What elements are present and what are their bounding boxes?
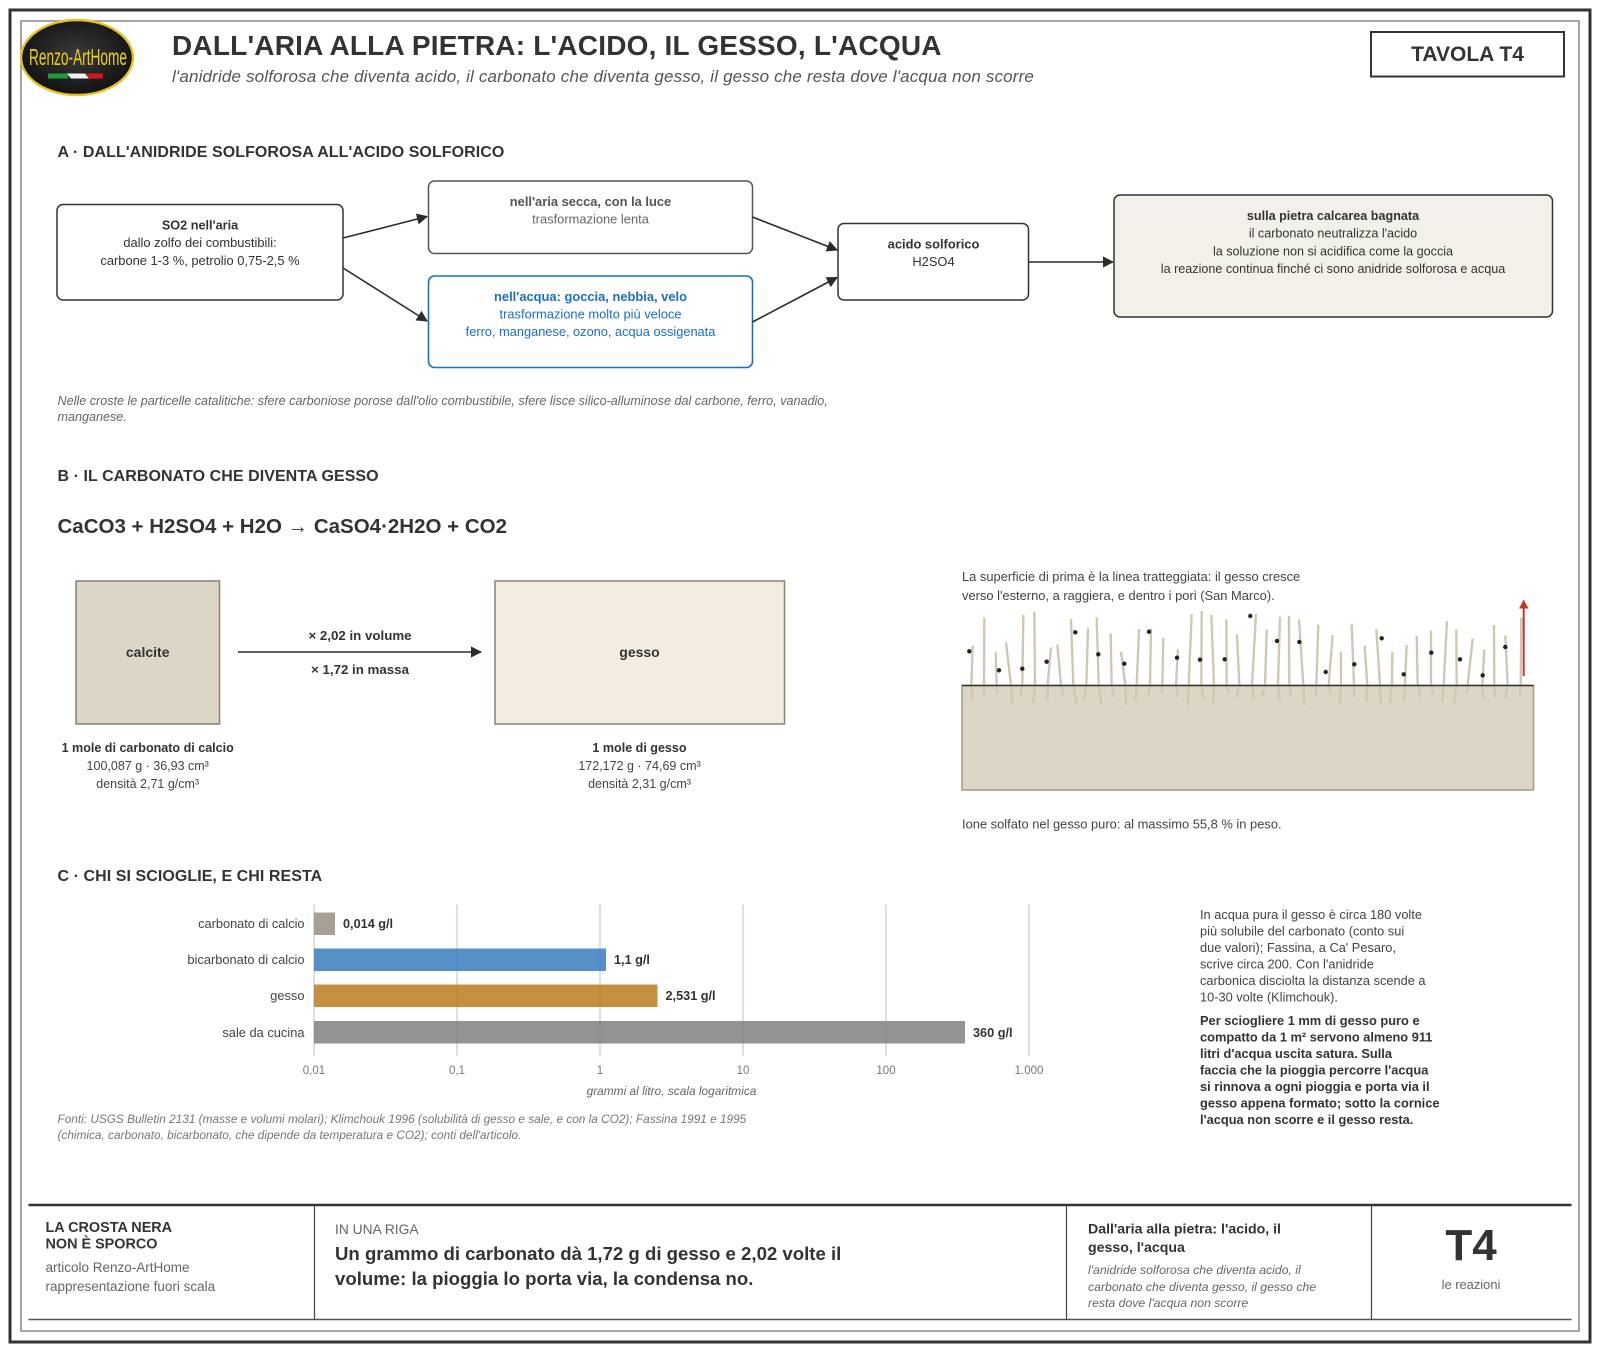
footer: series title [46,1220,216,1294]
footer: one-line summary: volume: la pioggia lo porta via, la condensa no. [335,1268,753,1289]
side note: water needed: gesso appena formato; sotto la cornice [1200,1096,1440,1110]
side note: water needed: Per sciogliere 1 mm di gesso puro e [1200,1013,1420,1028]
gypsum caption: densità 2,31 g/cm³ [588,777,691,791]
footer: series title: rappresentazione fuori scala [46,1279,216,1294]
logo: Renzo-ArtHome [21,20,133,95]
side note: solubility ratios [1200,907,1426,1004]
box: water path [428,276,752,368]
axis tick labels: 0,1 [449,1065,465,1077]
conversion arrow with factors: × 2,02 in volume [308,628,412,643]
box: on wet limestone: sulla pietra calcarea bagnata [1247,209,1420,223]
side note: solubility ratios: scrive circa 200. Con l'anidride [1200,956,1374,972]
calcite caption [62,741,234,791]
box: SO2 in air: carbone 1-3 %, petrolio 0,75-2,5 % [100,253,300,268]
gypsum caption: 1 mole di gesso [592,741,687,755]
box: dry air path [428,181,752,254]
bar: calcium carbonate: 0,014 g/l [343,917,393,931]
solubility bar chart [187,904,1043,1098]
footer: one-line summary: IN UNA RIGA [335,1222,419,1237]
stone block [962,686,1534,790]
calcite block: calcite [126,644,170,660]
bar: calcium carbonate: carbonato di calcio [198,916,304,931]
box: on wet limestone: la reazione continua finché ci sono anidride solforosa e acqua [1161,262,1505,276]
footer: plate title [1088,1220,1316,1310]
side note: water needed: compatto da 1 m² servono almeno 911 [1200,1030,1432,1044]
diagram: gypsum crystals on stone [962,600,1534,790]
box: on wet limestone: il carbonato neutralizza l'acido [1249,226,1417,240]
box: sulphuric acid: H2SO4 [912,254,955,269]
box: SO2 in air: dallo zolfo dei combustibili: [123,235,277,250]
side note: water needed: l'acqua non scorre e il gesso resta. [1200,1112,1413,1127]
crust diagram caption: La superficie di prima è la linea tratteggiata: il gesso cresce [962,569,1300,584]
footer: plate title: carbonato che diventa gesso, il gesso che [1088,1280,1316,1294]
gypsum caption: 172,172 g · 74,69 cm³ [578,759,701,773]
note on catalytic particles: Nelle croste le particelle catalitiche: sfere carboniose porose dall'olio combustibile, sfere lisce silico-alluminose dal carbone, ferro, vanadio, [58,394,828,408]
note on catalytic particles [58,394,828,424]
footer: plate title: Dall'aria alla pietra: l'acido, il [1088,1220,1281,1236]
bar: calcium bicarbonate: bicarbonato di calcio [187,952,304,967]
bar: calcium bicarbonate [187,948,650,971]
axis tick labels: 1.000 [1015,1065,1043,1077]
grid lines [314,904,1029,1056]
arrow: acid to limestone [1028,261,1113,263]
box: sulphuric acid [838,224,1028,300]
bar: table salt [222,1021,1012,1044]
footer: plate title: l'anidride solforosa che diventa acido, il [1088,1263,1301,1277]
box: water path: ferro, manganese, ozono, acqua ossigenata [466,324,716,339]
plate badge [1371,32,1564,76]
section B heading: B · IL CARBONATO CHE DIVENTA GESSO [58,468,379,485]
panel B: carbonate becomes gypsum [58,468,1534,832]
conversion arrow with factors: × 1,72 in massa [311,662,410,677]
side note: water needed: litri d'acqua uscita satura. Sulla [1200,1046,1393,1061]
footer: plate title: resta dove l'acqua non scorre [1088,1296,1249,1310]
axis tick labels: 1 [597,1065,603,1077]
crust diagram caption [962,569,1300,603]
box: SO2 in air: SO2 nell'aria [162,218,239,232]
side note: water needed: si rinnova a ogni pioggia e porta via il [1200,1079,1430,1094]
axis tick labels [303,1065,1043,1077]
crust diagram caption: verso l'esterno, a raggiera, e dentro i pori (San Marco). [962,588,1275,603]
section C heading: C · CHI SI SCIOGLIE, E CHI RESTA [58,868,323,885]
arrow: dry air to acid [752,217,837,250]
gypsum caption [578,741,701,791]
footer: plate number [1442,1221,1500,1292]
box: on wet limestone: la soluzione non si acidifica come la goccia [1213,244,1453,258]
axis title: grammi al litro, scala logaritmica [587,1084,757,1098]
axis tick labels: 10 [737,1065,749,1077]
panel C: who dissolves and who stays [58,868,1440,1142]
bar: gypsum: 2,531 g/l [666,989,716,1003]
footer strip [28,1205,1572,1320]
arrow: water to acid [752,278,837,322]
bar: calcium carbonate [198,912,393,935]
footer: plate number: le reazioni [1442,1277,1500,1292]
footer: plate number: T4 [1445,1221,1497,1270]
axis tick labels: 0,01 [303,1065,325,1077]
side note: water needed [1200,1013,1440,1127]
footer: plate title: gesso, l'acqua [1088,1239,1185,1255]
chemical equation: CaCO3 + H2SO4 + H2O → CaSO4·2H2O + CO2 [58,515,507,538]
panel A: from sulphur dioxide to sulphuric acid [57,144,1552,424]
footer: one-line summary [335,1222,841,1289]
arrow: SO2 to dry air [343,216,427,238]
bar: table salt: sale da cucina [222,1025,305,1040]
box: dry air path: trasformazione lenta [532,212,650,226]
gypsum block: gesso [619,644,660,660]
side note: water needed: faccia che la pioggia percorre l'acqua [1200,1062,1429,1078]
note on catalytic particles: manganese. [58,410,127,424]
sulphate note: Ione solfato nel gesso puro: al massimo 55,8 % in peso. [962,816,1282,832]
bar: table salt: 360 g/l [973,1026,1012,1040]
bar: calcium bicarbonate: 1,1 g/l [614,953,650,967]
header subtitle: l'anidride solforosa che diventa acido, il carbonato che diventa gesso, il gesso che resta dove l'acqua non scorre [172,67,1034,86]
gypsum needles, right half [1252,614,1521,705]
side note: solubility ratios: 10-30 volte (Klimchouk). [1200,990,1338,1004]
box: on wet limestone [1114,195,1552,317]
axis tick labels: 100 [876,1065,896,1077]
box: dry air path: nell'aria secca, con la luce [510,194,671,209]
bar: gypsum [270,984,716,1007]
sulphate and particle dots [967,614,1508,678]
footer: series title: LA CROSTA NERA [46,1220,173,1236]
box: sulphuric acid: acido solforico [888,236,979,252]
side note: solubility ratios: carbonica disciolta la distanza scende a [1200,973,1426,988]
side note: solubility ratios: In acqua pura il gesso è circa 180 volte [1200,907,1422,922]
calcite block [76,581,220,724]
calcite caption: 1 mole di carbonato di calcio [62,741,234,755]
arrow: SO2 to water [343,268,427,321]
side note: solubility ratios: due valori); Fassina, a Ca' Pesaro, [1200,940,1396,955]
original surface line [962,684,1534,686]
box: water path: nell'acqua: goccia, nebbia, velo [494,289,687,304]
sources: Fonti: USGS Bulletin 2131 (masse e volumi molari); Klimchouk 1996 (solubilità di gesso e sale, e con la CO2); Fassina 1991 e 1995 [58,1112,747,1126]
logo: Renzo-ArtHome: Renzo-ArtHome [29,44,127,70]
section A heading: A · DALL'ANIDRIDE SOLFOROSA ALL'ACIDO SOLFORICO [58,144,504,161]
conversion arrow with factors [238,628,481,677]
box: water path: trasformazione molto più veloce [500,306,682,322]
footer: series title: NON È SPORCO [46,1236,157,1252]
footer: one-line summary: Un grammo di carbonato dà 1,72 g di gesso e 2,02 volte il [335,1243,841,1264]
gypsum needles, left half [971,611,1239,705]
growth arrow [1519,600,1528,676]
box: SO2 in air [57,204,343,300]
sources [58,1112,747,1142]
gypsum block [495,581,784,724]
footer: series title: articolo Renzo-ArtHome [46,1260,190,1275]
sources: (chimica, carbonato, bicarbonato, che dipende da temperatura e CO2); conti dell'articolo. [58,1128,521,1142]
calcite caption: 100,087 g · 36,93 cm³ [87,759,209,773]
calcite caption: densità 2,71 g/cm³ [96,777,199,791]
bar: gypsum: gesso [270,988,304,1003]
plate badge: TAVOLA T4 [1411,43,1524,66]
header title: DALL'ARIA ALLA PIETRA: L'ACIDO, IL GESSO, L'ACQUA [172,30,942,61]
side note: solubility ratios: più solubile del carbonato (conto sui [1200,924,1404,938]
